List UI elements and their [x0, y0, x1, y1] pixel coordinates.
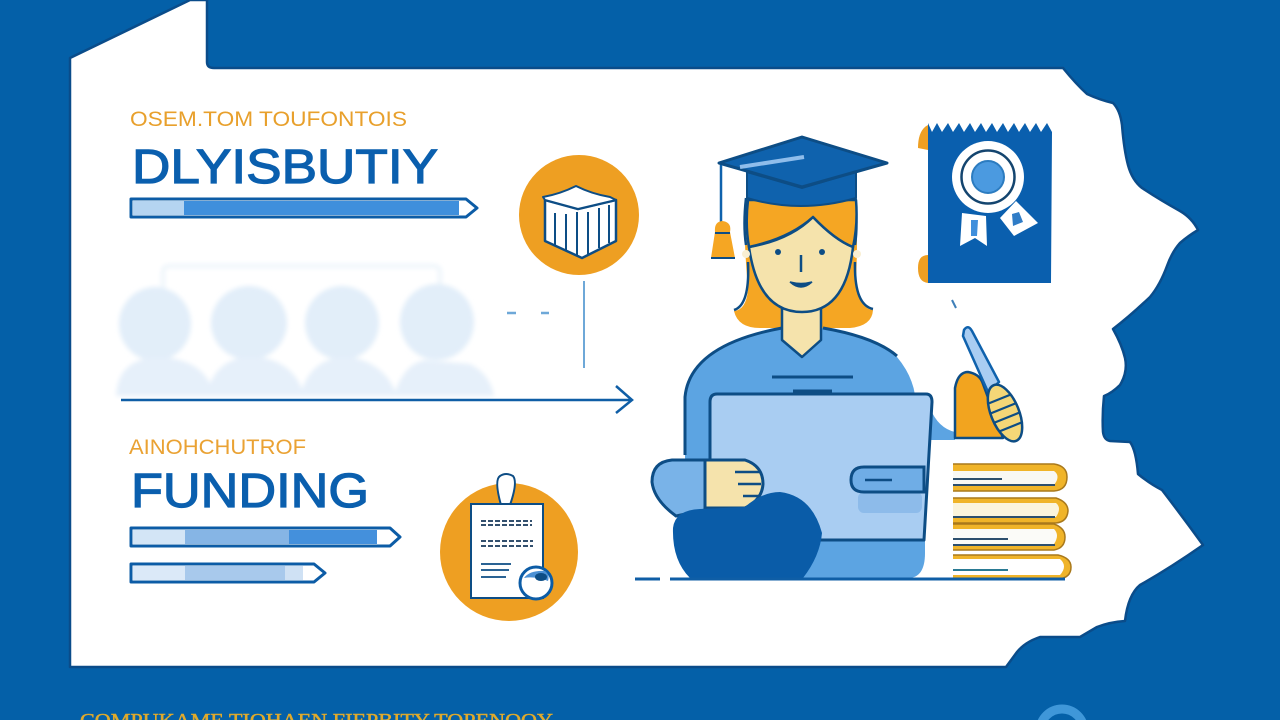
right arm — [930, 408, 955, 440]
neck — [782, 308, 821, 357]
small mark — [952, 300, 956, 308]
tablet shadow — [858, 492, 922, 513]
icon: document in orange circle — [440, 474, 578, 621]
smile — [790, 282, 812, 287]
dashes — [507, 312, 549, 314]
faded group of people — [116, 266, 494, 396]
top section heading: DLYISBUTIY — [132, 141, 438, 194]
left hand — [705, 460, 763, 508]
funding bar one — [131, 528, 400, 546]
funding bar two — [131, 564, 325, 582]
left arm — [652, 460, 705, 516]
body — [685, 328, 925, 578]
tassel — [720, 165, 722, 224]
cap base — [747, 172, 856, 206]
stack of books — [953, 464, 1071, 579]
ears — [742, 250, 750, 258]
ground line — [635, 578, 1065, 580]
eyes and nose — [775, 249, 781, 255]
orange mitt — [955, 372, 1003, 438]
cap top — [719, 137, 887, 187]
fringe — [747, 200, 857, 247]
striped hand — [981, 380, 1029, 446]
footer logo arc — [1040, 709, 1084, 720]
icon: building in orange circle — [519, 155, 639, 275]
progress bar: top — [131, 199, 477, 217]
hair back — [734, 200, 873, 328]
illustration: graduate — [635, 137, 1071, 579]
face — [749, 217, 853, 312]
tablet clasp — [851, 467, 924, 492]
connector line — [583, 281, 585, 368]
lower section label: AINOHCHUTROF — [129, 436, 306, 459]
chest lines — [772, 377, 853, 391]
certificate with rosette — [918, 123, 1052, 283]
stylus — [963, 327, 999, 392]
dark blue lap — [673, 492, 822, 578]
lower section heading: FUNDING — [131, 465, 369, 518]
timeline arrow — [121, 386, 632, 413]
top section label: OSEM.TOM TOUFONTOIS — [130, 108, 407, 131]
tablet — [710, 394, 932, 540]
